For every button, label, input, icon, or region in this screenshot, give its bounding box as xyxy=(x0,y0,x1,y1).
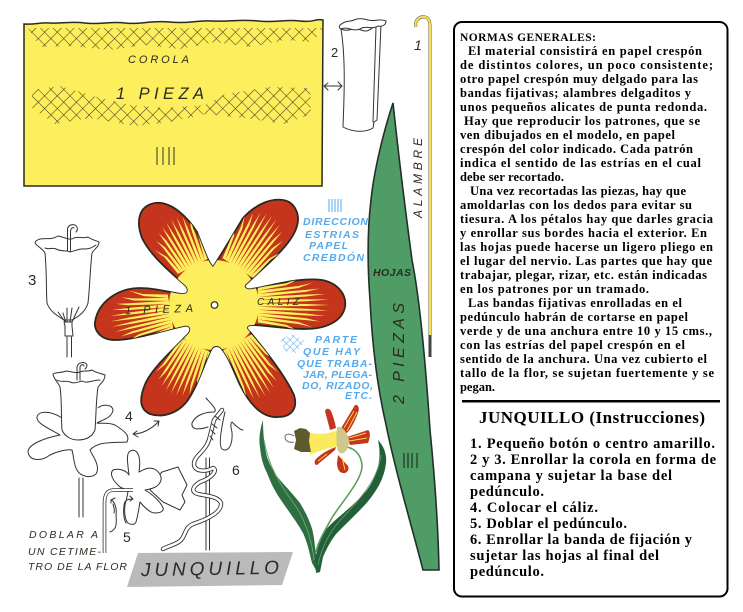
label: alambre: ALAMBRE xyxy=(411,137,425,219)
stem xyxy=(316,447,362,552)
text block: general rules: NORMAS GENERALES: xyxy=(460,32,596,44)
text block: general rules: amoldarlas con los dedos para evitar su xyxy=(460,198,692,212)
text block: general rules: sentido de la anchura. Una vez cubierto el xyxy=(460,352,708,366)
text block: general rules: bandas fijativas; alambres delgaditos y xyxy=(460,86,692,100)
trumpet xyxy=(308,430,342,455)
text block: numbered steps: sujetar las hojas al final del xyxy=(470,548,659,564)
text block: numbered steps: pedúnculo. xyxy=(470,484,544,500)
note: grain direction: CREBDÓN xyxy=(303,251,364,264)
text block: general rules: Hay que reproducir los patrones, que se xyxy=(464,114,700,128)
figure 4: bell with calyx xyxy=(28,363,159,517)
text block: numbered steps: 2 y 3. Enrollar la corola en forma de xyxy=(470,452,717,468)
note: area to work xyxy=(280,334,373,402)
note: grain direction: ESTRIAS xyxy=(305,229,359,241)
label: 2 piezas: 2 PIEZAS xyxy=(391,303,408,405)
number 1: 1 xyxy=(414,37,422,53)
panel: instructions xyxy=(454,22,728,596)
note: area to work: ETC. xyxy=(345,390,372,402)
note: fold one centimetre xyxy=(28,529,127,573)
arrow: calyx onto bell xyxy=(133,421,159,437)
figure 2: rolled corolla xyxy=(324,18,386,131)
note: fold one centimetre: DOBLAR A xyxy=(29,529,98,541)
divider rule xyxy=(462,400,720,402)
center hole xyxy=(211,302,218,308)
figure 3: bell xyxy=(28,225,99,357)
text block: numbered steps: 6. Enrollar la banda de fijación y xyxy=(470,532,693,548)
text block: general rules: crespón del color indicado. Cada patrón xyxy=(460,142,693,156)
note: fold one centimetre: UN CETIME- xyxy=(28,546,102,558)
figure 6: binding band on stem xyxy=(163,398,243,550)
number 4: 4 xyxy=(125,408,133,424)
note: area to work: DO, RIZADO, xyxy=(302,380,373,392)
panel: calyx pattern xyxy=(95,200,345,417)
label: 1 pieza: 1 PIEZA xyxy=(125,303,193,317)
right leaf rib xyxy=(318,455,381,565)
title plate: junquillo: JUNQUILLO xyxy=(140,558,279,581)
note: grain direction: DIRECCION xyxy=(303,216,368,228)
left leaf rib xyxy=(264,440,314,560)
text block: general rules: en los patrones por un tramado. xyxy=(460,282,649,296)
text block: numbered steps: 4. Colocar el cáliz. xyxy=(470,500,598,516)
arrow: width of corolla xyxy=(324,82,342,90)
hatched band: middle xyxy=(32,86,311,126)
label: corola: COROLA xyxy=(128,54,189,66)
number 6: 6 xyxy=(232,462,240,478)
note: area to work: JAR, PLEGA- xyxy=(303,369,372,381)
grain marks xyxy=(157,147,174,165)
note: area to work: QUE HAY xyxy=(303,346,361,358)
figure 1: wire xyxy=(411,17,430,357)
text block: general rules: pedúnculo habrán de cortarse en papel xyxy=(460,310,689,324)
text block: general rules: pegan. xyxy=(460,380,495,394)
text block: numbered steps: 5. Doblar el pedúnculo. xyxy=(470,516,627,532)
text block: numbered steps xyxy=(470,436,717,580)
text block: general rules: con las estrías del papel crespón en el xyxy=(460,338,686,352)
panel: corolla pattern xyxy=(24,20,323,186)
grain marks xyxy=(404,453,417,468)
hook xyxy=(285,434,294,442)
text block: general rules xyxy=(460,32,714,394)
text block: numbered steps: campana y sujetar la base del xyxy=(470,468,672,484)
label: 1 pieza: 1 PIEZA xyxy=(116,85,204,103)
text block: general rules: Una vez recortadas las piezas, hay que xyxy=(470,184,686,198)
text block: general rules: unos pequeños alicates de punta redonda. xyxy=(460,100,707,114)
heading: junquillo instructions: JUNQUILLO (Instrucciones) xyxy=(479,408,705,427)
petals xyxy=(340,405,359,433)
note: grain direction xyxy=(303,199,368,264)
text block: general rules: ven dibujados en el modelo, en papel xyxy=(460,128,676,142)
text block: general rules: tallo de la flor, se sujetan fuertemente y se xyxy=(460,366,714,380)
note: fold one centimetre: TRO DE LA FLOR xyxy=(28,561,127,573)
left leaf xyxy=(259,420,320,572)
text block: general rules: Las bandas fijativas enrolladas en el xyxy=(468,296,683,310)
text block: general rules: verde y de una anchura entre 10 y 15 cms., xyxy=(460,324,712,338)
text block: general rules: indica el sentido de las estrías en el cual xyxy=(460,156,702,170)
frilled rim xyxy=(294,428,311,452)
right leaf xyxy=(315,440,386,573)
note: grain direction: PAPEL xyxy=(309,240,348,252)
panel: leaf pattern xyxy=(368,103,439,570)
text block: general rules: el lugar del nervio. Las partes que hay que xyxy=(460,254,712,268)
number 3: 3 xyxy=(28,272,36,289)
illustration: finished junquillo flower xyxy=(259,405,386,573)
text block: general rules: de distintos colores, un poco consistente; xyxy=(460,58,713,72)
title plate: junquillo xyxy=(127,552,293,587)
text block: numbered steps: pedúnculo. xyxy=(470,564,544,580)
number 2: 2 xyxy=(331,45,338,60)
text block: general rules: trabajar, plegar, rizar, etc. están indicadas xyxy=(460,268,707,282)
arrow: bend direction xyxy=(110,496,133,532)
text block: general rules: El material consistirá en papel crespón xyxy=(468,44,702,58)
number 5: 5 xyxy=(123,529,131,545)
text block: general rules: las hojas puede hacerse un ligero pliego en xyxy=(460,240,713,254)
hatched band: top xyxy=(28,28,322,50)
text block: general rules: debe ser recortado. xyxy=(460,170,564,184)
text block: general rules: tiesura. A los pétalos hay que darles gracia xyxy=(460,212,714,226)
text block: general rules: otro papel crespón muy delgado para las xyxy=(460,72,698,86)
calyx centre xyxy=(336,427,349,453)
text block: numbered steps: 1. Pequeño botón o centro amarillo. xyxy=(470,436,715,452)
label: caliz: CALIZ xyxy=(257,297,300,308)
text block: general rules: y enrollar sus bordes hacia el exterior. En xyxy=(460,226,707,240)
label: hojas: HOJAS xyxy=(373,267,411,279)
figure 5: bending the stem xyxy=(28,450,187,573)
note: area to work: PARTE xyxy=(315,334,358,346)
note: area to work: QUE TRABA- xyxy=(297,358,372,370)
